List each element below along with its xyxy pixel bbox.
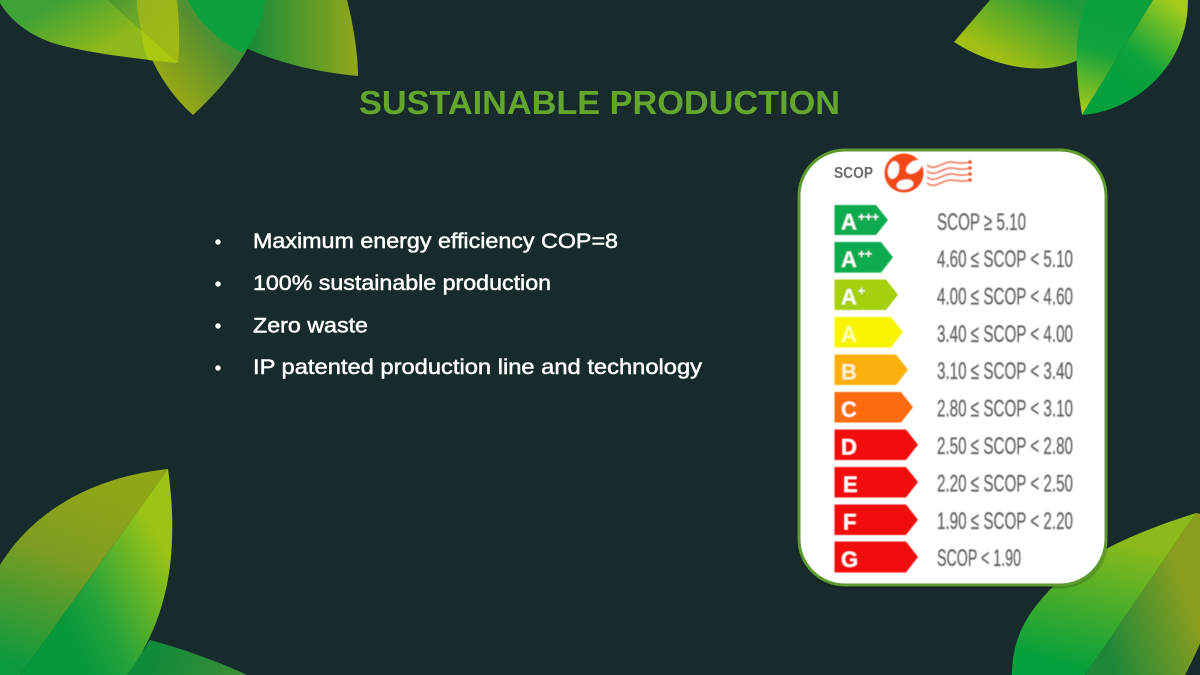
bullet 3 [216, 314, 368, 338]
row A++: ++ [858, 247, 872, 261]
bottom-left leaves [0, 469, 247, 675]
row C [834, 392, 1073, 423]
panel: SCOP energy rating scale [799, 150, 1106, 585]
bullet list [216, 229, 702, 379]
SCOP label: SCOP [834, 165, 873, 182]
row C: C [841, 397, 857, 422]
row A++: A [841, 247, 857, 272]
title: SUSTAINABLE PRODUCTION [359, 84, 840, 121]
bottom-right leaf [1012, 513, 1200, 675]
row A+++: SCOP ≥ 5.10 [937, 209, 1026, 236]
row G: G [841, 547, 858, 572]
bullet 3: Zero waste [253, 314, 368, 338]
row A+: 4.00 ≤ SCOP < 4.60 [937, 283, 1073, 310]
row A+ [834, 280, 1073, 310]
top-right leaves [954, 0, 1188, 115]
icon: fan with heat waves [884, 154, 972, 192]
row F: F [843, 510, 856, 534]
row E: E [843, 472, 858, 497]
row A++ [834, 242, 1073, 273]
row D: 2.50 ≤ SCOP < 2.80 [937, 433, 1073, 460]
row F [834, 504, 1073, 535]
row B: 3.10 ≤ SCOP < 3.40 [937, 358, 1073, 385]
row C: 2.80 ≤ SCOP < 3.10 [937, 396, 1073, 423]
row D [834, 430, 1073, 460]
row A: A [841, 322, 857, 347]
row A+++: +++ [858, 210, 879, 224]
row A+++: A [841, 210, 857, 234]
row A+: + [858, 284, 865, 298]
bullet 4: IP patented production line and technology [253, 355, 702, 379]
card [799, 150, 1106, 585]
row F: 1.90 ≤ SCOP < 2.20 [937, 508, 1073, 535]
row G [834, 542, 1021, 572]
row B: B [841, 360, 857, 384]
row A: 3.40 ≤ SCOP < 4.00 [937, 321, 1073, 348]
row A [834, 317, 1073, 348]
row A+: A [841, 284, 857, 310]
row B [834, 354, 1073, 385]
rating rows [834, 205, 1073, 572]
row D: D [841, 434, 857, 460]
row A+++ [834, 205, 1026, 236]
row A++: 4.60 ≤ SCOP < 5.10 [937, 246, 1073, 273]
top-left leaves [0, 0, 358, 115]
row E [834, 467, 1073, 498]
bullet 1: Maximum energy efficiency COP=8 [253, 229, 618, 253]
row G: SCOP < 1.90 [937, 545, 1021, 572]
bullet 2: 100% sustainable production [253, 271, 551, 295]
row E: 2.20 ≤ SCOP < 2.50 [937, 470, 1073, 497]
